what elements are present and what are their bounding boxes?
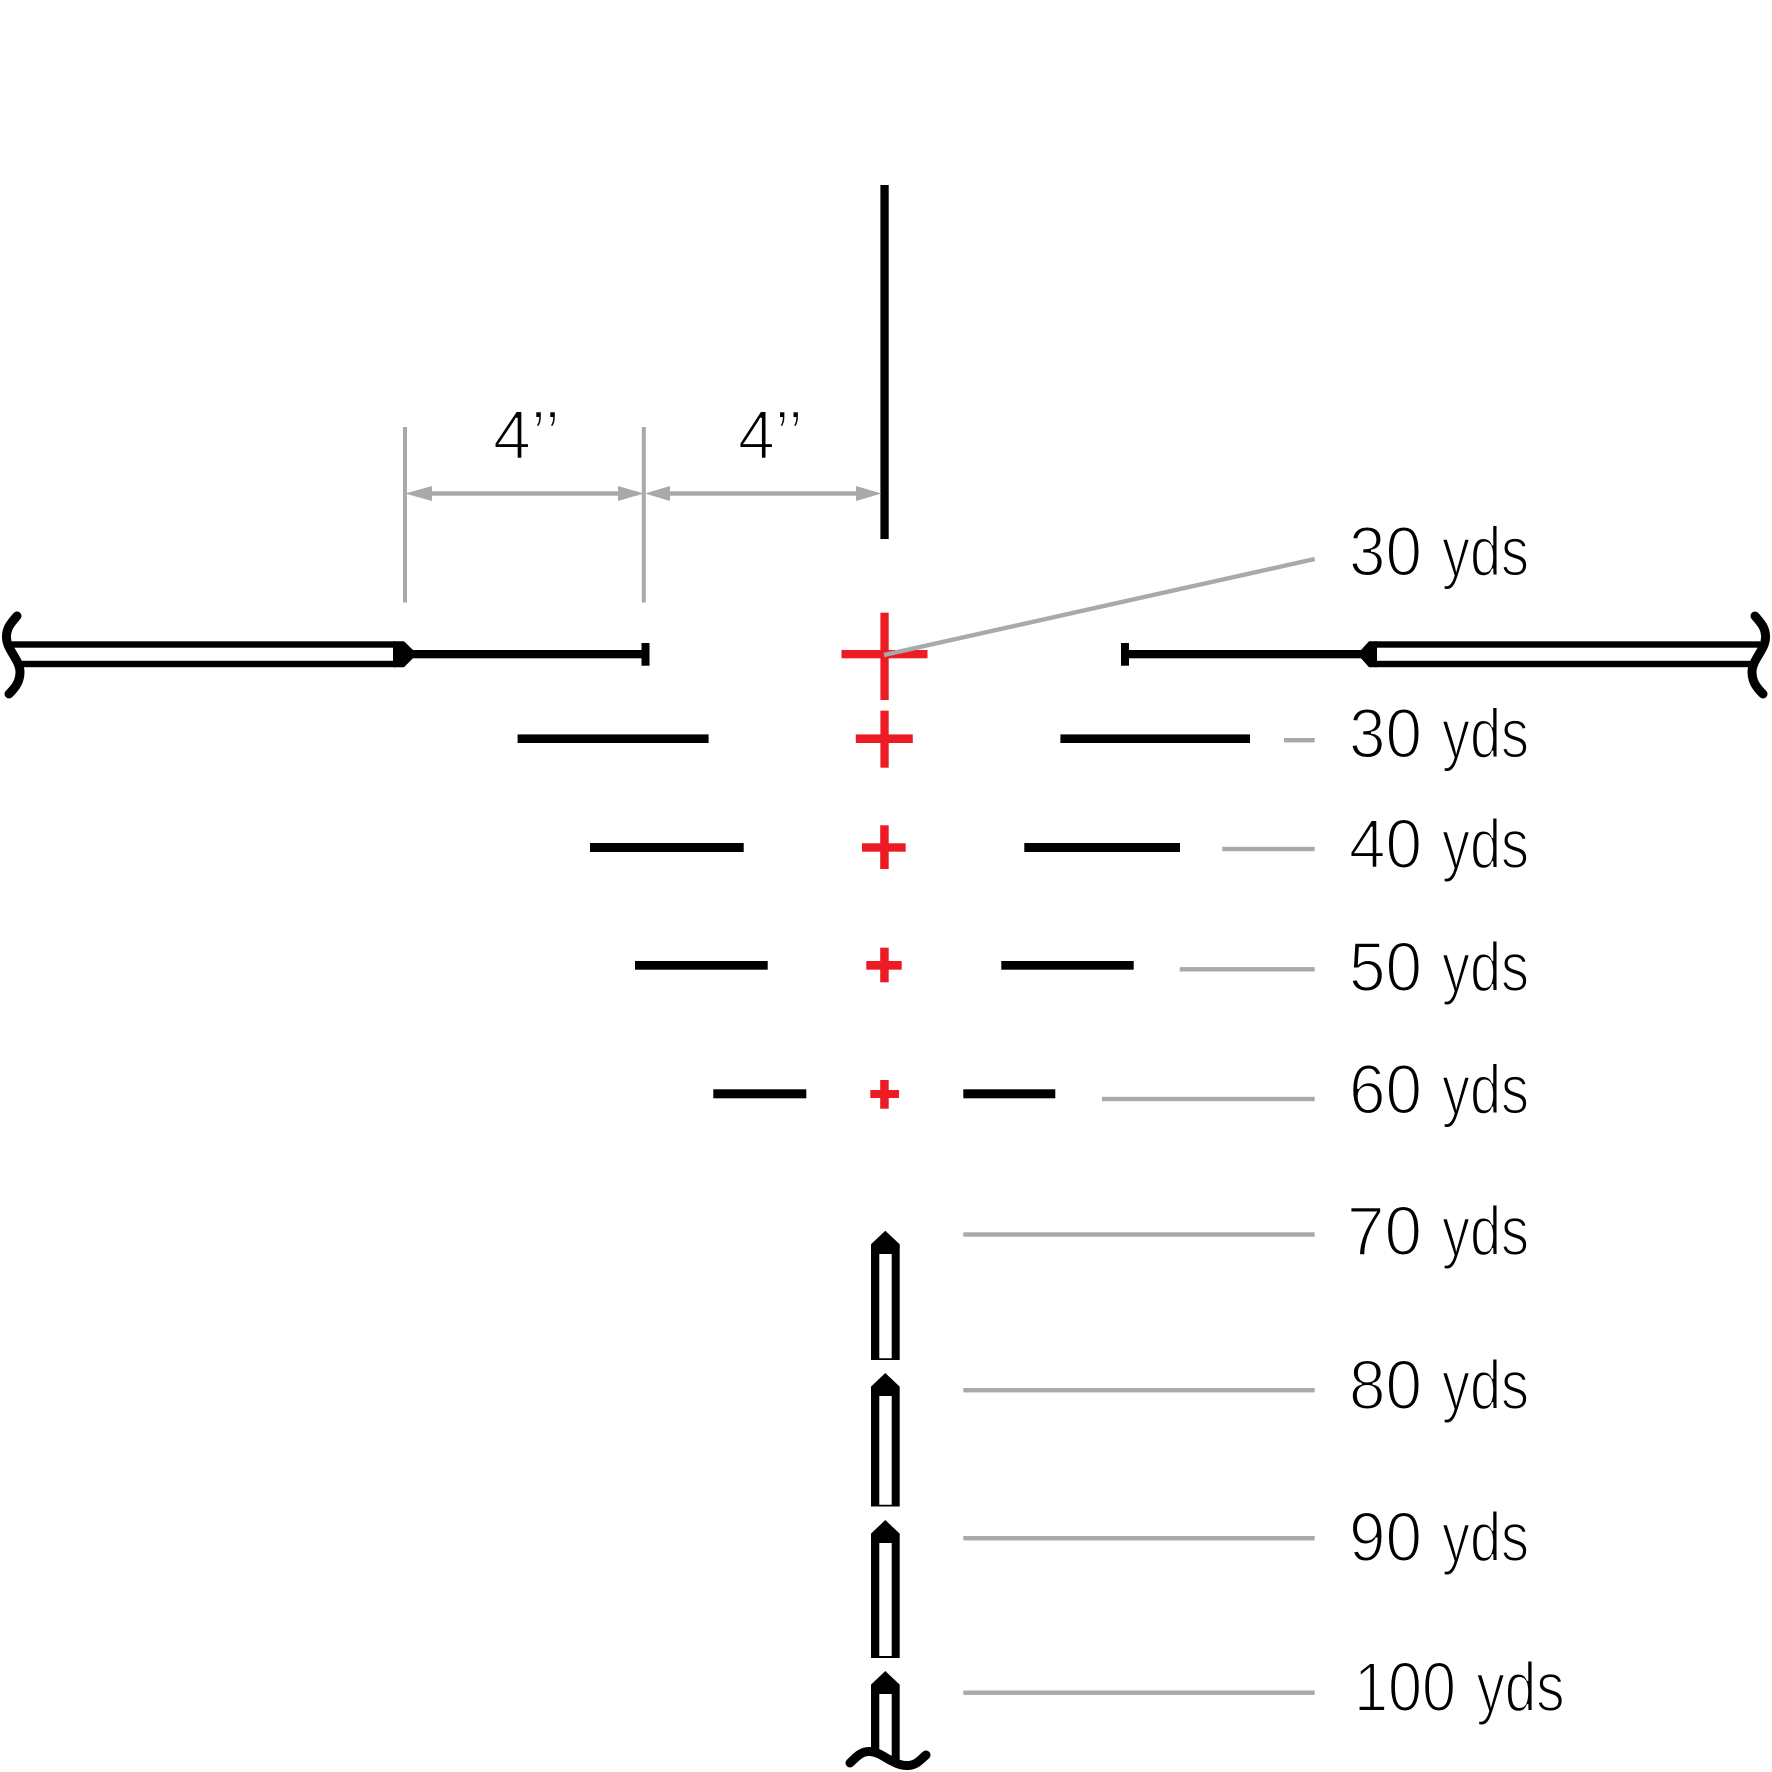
leader line: 30 yds primary — [884, 559, 1315, 655]
label: 60 yds: 60 — [1349, 1050, 1422, 1128]
label: 100 yds: 100 — [1354, 1648, 1456, 1726]
leader line: 80 yds — [963, 1388, 1315, 1392]
label: 70 yds: yds — [1442, 1192, 1529, 1270]
label: 40 yds: yds — [1442, 805, 1529, 883]
label: left 4 inches: 4’’ — [493, 396, 560, 474]
marker: 90 yds arrow — [871, 1520, 900, 1658]
dimension: right 4 inch span — [645, 486, 882, 501]
marker: 70 yds arrow — [871, 1231, 900, 1360]
top vertical post — [880, 185, 889, 539]
row: 50 yds — [635, 948, 1315, 982]
row: 40 yds — [590, 825, 1315, 869]
dimension: left 4 inch span — [403, 427, 646, 602]
label: 80 yds: 80 — [1349, 1346, 1422, 1424]
label: right 4 inches: 4’’ — [738, 396, 803, 474]
label: 30 yds primary: 30 — [1349, 512, 1422, 590]
label: 100 yds: yds — [1476, 1648, 1564, 1726]
label: 30 yds primary: yds — [1442, 512, 1529, 590]
leader line: 70 yds — [963, 1232, 1315, 1237]
label: 80 yds: yds — [1442, 1346, 1529, 1424]
label: 70 yds: 70 — [1347, 1192, 1422, 1270]
leader line: 90 yds — [963, 1536, 1315, 1540]
red cross: 30 yds primary — [842, 613, 928, 700]
label: 50 yds: yds — [1442, 928, 1529, 1006]
right horizontal post — [1121, 616, 1766, 694]
marker: 100 yds arrow with break — [850, 1671, 926, 1766]
label: 50 yds: 50 — [1349, 928, 1422, 1006]
label: 90 yds: 90 — [1349, 1498, 1422, 1576]
label: 30 yds: 30 — [1349, 694, 1422, 772]
marker: 80 yds arrow — [871, 1373, 900, 1506]
label: 40 yds: 40 — [1349, 805, 1422, 883]
row: 60 yds — [713, 1080, 1315, 1109]
label: 30 yds: yds — [1442, 694, 1529, 772]
leader line: 100 yds — [963, 1690, 1315, 1695]
left horizontal post — [6, 616, 650, 694]
label: 60 yds: yds — [1442, 1050, 1529, 1128]
label: 90 yds: yds — [1442, 1498, 1529, 1576]
row: 30 yds — [518, 711, 1315, 768]
